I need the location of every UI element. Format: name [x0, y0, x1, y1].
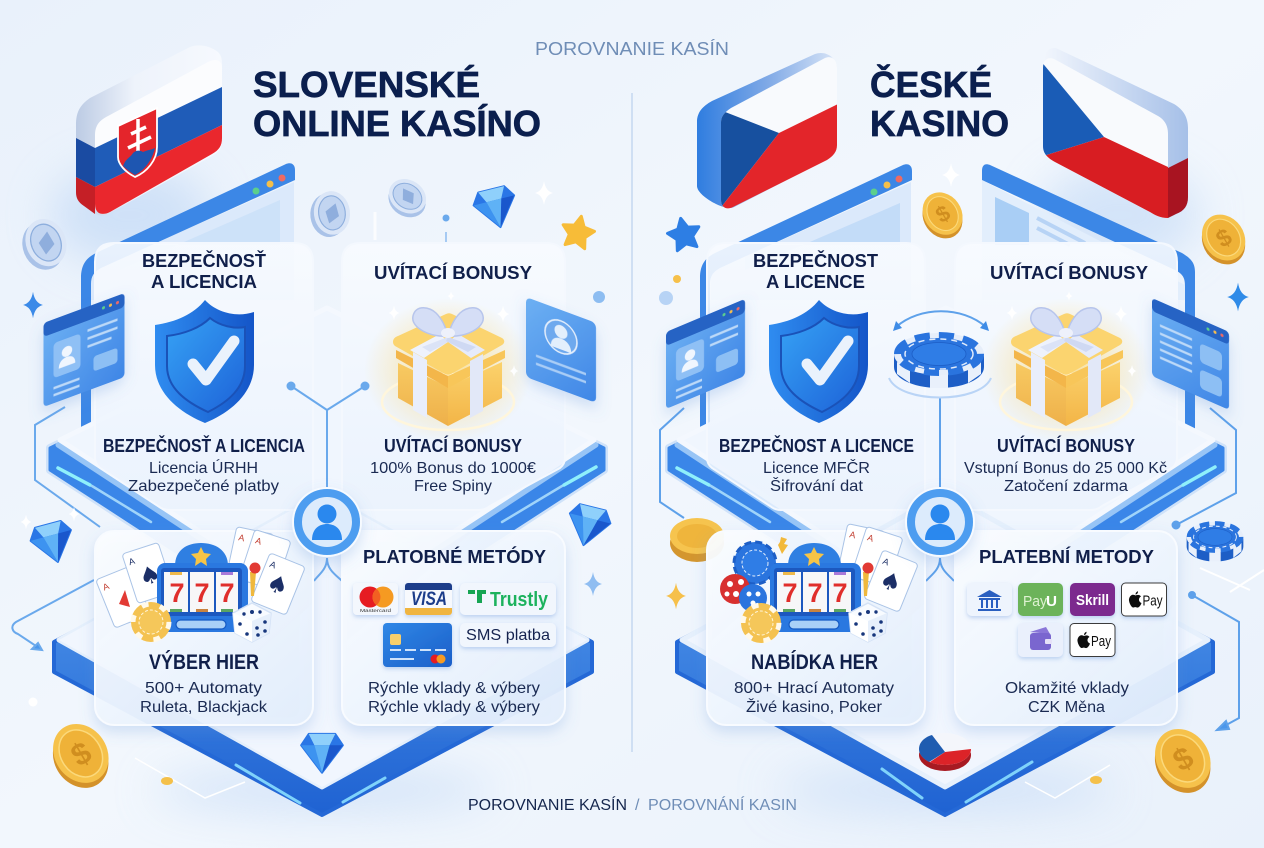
- bottom caption: POROVNANIE KASÍN: [468, 795, 627, 814]
- text block: BEZPEČNOSŤ A LICENCIA: [103, 435, 305, 456]
- icon: Czech flag disc: [919, 733, 971, 771]
- illustration: slot machine with chips, dice and cards: 7: [832, 578, 848, 608]
- illustration: slot machine with cards, chip and dice: 7: [194, 578, 210, 608]
- text block: Free Spiny: [414, 478, 492, 495]
- heading: UVÍTACÍ BONUSY: [374, 262, 533, 283]
- decorative coins, star and dots: Czech top: [659, 163, 1254, 311]
- title: Czech casino: [870, 63, 1009, 144]
- platform: Czech upper plate: [669, 308, 1223, 650]
- card: Czech payment methods: [955, 531, 1177, 725]
- illustration: slot machine with cards, chip and dice: ♠: [262, 568, 293, 602]
- decorative coins, gems and stars: Slovak top: [15, 164, 605, 318]
- bottom caption: [468, 795, 797, 814]
- text block: Zatočení zdarma: [1004, 478, 1128, 495]
- logo: Apple Pay second: [1070, 624, 1115, 656]
- text block: [368, 680, 540, 716]
- text block: Šifrování dat: [770, 476, 864, 495]
- connector: Slovak centre branching lines: [288, 382, 368, 581]
- heading: BEZPEČNOSŤ: [142, 250, 267, 271]
- text block: 800+ Hrací Automaty: [734, 680, 894, 697]
- text block: [719, 435, 914, 495]
- icon: credit card: [383, 623, 452, 667]
- panel: Slovak browser window: [81, 163, 295, 440]
- text block: Vstupní Bonus do 25 000 Kč: [964, 460, 1167, 477]
- logo: Skrill: [1070, 583, 1115, 616]
- illustration: slot machine with chips, dice and cards: 7: [807, 578, 823, 608]
- illustration: slot machine with cards, chip and dice: A: [127, 556, 136, 567]
- text block: UVÍTACÍ BONUSY: [997, 435, 1136, 456]
- text block: BEZPEČNOST A LICENCE: [719, 435, 914, 456]
- text block: [103, 435, 305, 495]
- icon: settings window right, Czech side: [1152, 298, 1229, 410]
- connectors: Czech side: [660, 408, 1239, 730]
- title: Czech casino: KASINO: [870, 103, 1009, 144]
- bottom caption: POROVNÁNÍ KASIN: [648, 795, 797, 814]
- panel: Czech browser window left: [700, 164, 912, 440]
- logo: Mastercard: [353, 583, 398, 615]
- central divider: [631, 93, 633, 752]
- illustration: slot machine with cards, chip and dice: A: [238, 532, 246, 543]
- card: Slovak security and licence: [95, 243, 313, 510]
- illustration: slot machine with chips, dice and cards: A: [866, 532, 875, 544]
- card: Czech game offer: [707, 524, 925, 725]
- heading: A LICENCIA: [151, 271, 257, 292]
- bottom caption: /: [635, 797, 640, 814]
- card: Slovak welcome bonuses: [342, 243, 565, 510]
- text block: Rýchle vklady & výbery: [368, 699, 540, 716]
- heading: [753, 250, 879, 292]
- icon: wallet: [1018, 623, 1063, 657]
- title: Slovak online casino: [253, 64, 541, 144]
- logo: Skrill: Skrill: [1076, 592, 1109, 609]
- logo: Apple Pay: [1122, 583, 1166, 616]
- icon: shield with check: [769, 300, 868, 423]
- icon: gift box: [982, 291, 1150, 442]
- text block: [140, 680, 268, 716]
- panel: Czech browser window right: [982, 164, 1195, 440]
- logo: Visa: [405, 583, 452, 615]
- card: Slovak payment methods: [342, 531, 565, 725]
- platform: Slovak lower plate: [54, 493, 592, 815]
- text block: [1005, 680, 1129, 716]
- top caption: POROVNANIE KASÍN: [535, 39, 729, 59]
- heading: [142, 250, 267, 292]
- illustration: slot machine with chips, dice and cards: A: [881, 556, 891, 567]
- badge: SMS payment: SMS platba: [466, 627, 550, 644]
- platform: Slovak upper plate: [50, 308, 604, 650]
- logo: PayU: U: [1046, 593, 1057, 610]
- illustration: slot machine with cards, chip and dice: A: [254, 535, 263, 547]
- heading: PLATOBNÉ METÓDY: [363, 546, 547, 567]
- illustration: slot machine with cards, chip and dice: A: [268, 559, 278, 570]
- logo: Mastercard: Mastercard: [360, 608, 392, 613]
- text block: [964, 435, 1167, 495]
- text block: Rýchle vklady & výbery: [368, 680, 540, 697]
- heading: VÝBER HIER: [149, 650, 259, 674]
- illustration: slot machine with cards, chip and dice: ♠: [135, 559, 164, 592]
- platform: Czech lower plate: [677, 493, 1213, 815]
- heading: UVÍTACÍ BONUSY: [990, 262, 1149, 283]
- text block: [734, 680, 894, 716]
- flag: Czech left: [697, 50, 840, 215]
- text block: UVÍTACÍ BONUSY: [384, 435, 523, 456]
- text block: Okamžité vklady: [1005, 680, 1129, 697]
- icon: small profile window left, Slovak side: [44, 293, 124, 407]
- logo: Visa: VISA: [411, 589, 447, 610]
- title: Czech casino: ČESKÉ: [870, 63, 992, 105]
- decorative chip, coin and sparkle: Czech bottom: [666, 522, 1264, 804]
- title: Slovak online casino: SLOVENSKÉ: [253, 64, 480, 105]
- icon: shield with check: [155, 300, 254, 423]
- decorative gems, coin and sparkles: Slovak bottom: [21, 502, 613, 799]
- icon: poker chip with arrows, Czech centre: [889, 311, 991, 398]
- illustration: slot machine with cards, chip and dice: 7: [169, 578, 185, 608]
- badge: Czech central user: [905, 487, 975, 557]
- icon: profile card right, Slovak side: [526, 297, 596, 403]
- illustration: slot machine with cards, chip and dice: 7: [219, 578, 235, 608]
- card: Slovak game selection: [95, 527, 313, 725]
- text block: Ruleta, Blackjack: [140, 699, 268, 716]
- icon: gift box: [364, 291, 532, 442]
- heading: PLATEBNÍ METODY: [979, 546, 1155, 567]
- heading: BEZPEČNOST: [753, 250, 879, 271]
- text block: Licencia ÚRHH: [149, 458, 258, 477]
- badge: SMS payment: [460, 623, 556, 647]
- flag: Slovakia: [76, 45, 230, 220]
- illustration: slot machine with chips, dice and cards: 7: [782, 578, 798, 608]
- connectors: Slovak side: [12, 407, 100, 650]
- heading: NABÍDKA HER: [751, 651, 878, 674]
- text block: 500+ Automaty: [145, 680, 262, 697]
- logo: Trustly: [460, 583, 556, 615]
- illustration: slot machine with cards, chip and dice: [96, 527, 305, 642]
- flag: Czech right: [1040, 48, 1188, 220]
- text block: CZK Měna: [1028, 699, 1105, 716]
- illustration: slot machine with chips, dice and cards: ♠: [875, 565, 906, 599]
- illustration: slot machine with chips, dice and cards: A: [849, 529, 857, 540]
- text block: Živé kasino, Poker: [746, 697, 883, 716]
- icon: small profile window left, Czech side: [666, 299, 745, 409]
- text block: [370, 435, 536, 495]
- illustration: slot machine with chips, dice and cards: [720, 524, 918, 643]
- connector: Czech centre lines: [926, 398, 954, 581]
- badge: Slovak central user: [292, 487, 362, 557]
- logo: Trustly: Trustly: [490, 589, 549, 611]
- title: Slovak online casino: ONLINE KASÍNO: [253, 103, 541, 144]
- heading: A LICENCE: [766, 271, 865, 292]
- logo: PayU: [1018, 583, 1063, 616]
- text block: Zabezpečené platby: [128, 478, 279, 495]
- icon: Slovak coat of arms: [118, 108, 157, 177]
- icon: gold coin behind Czech games card: [670, 518, 724, 562]
- icon: bank: [967, 583, 1012, 616]
- text block: Licence MFČR: [763, 458, 870, 477]
- text block: 100% Bonus do 1000€: [370, 460, 536, 477]
- illustration: slot machine with cards, chip and dice: A: [101, 581, 111, 592]
- card: Czech welcome bonuses: [955, 243, 1177, 510]
- logo: PayU: Pay: [1023, 593, 1047, 610]
- card: Czech security and licence: [707, 243, 925, 510]
